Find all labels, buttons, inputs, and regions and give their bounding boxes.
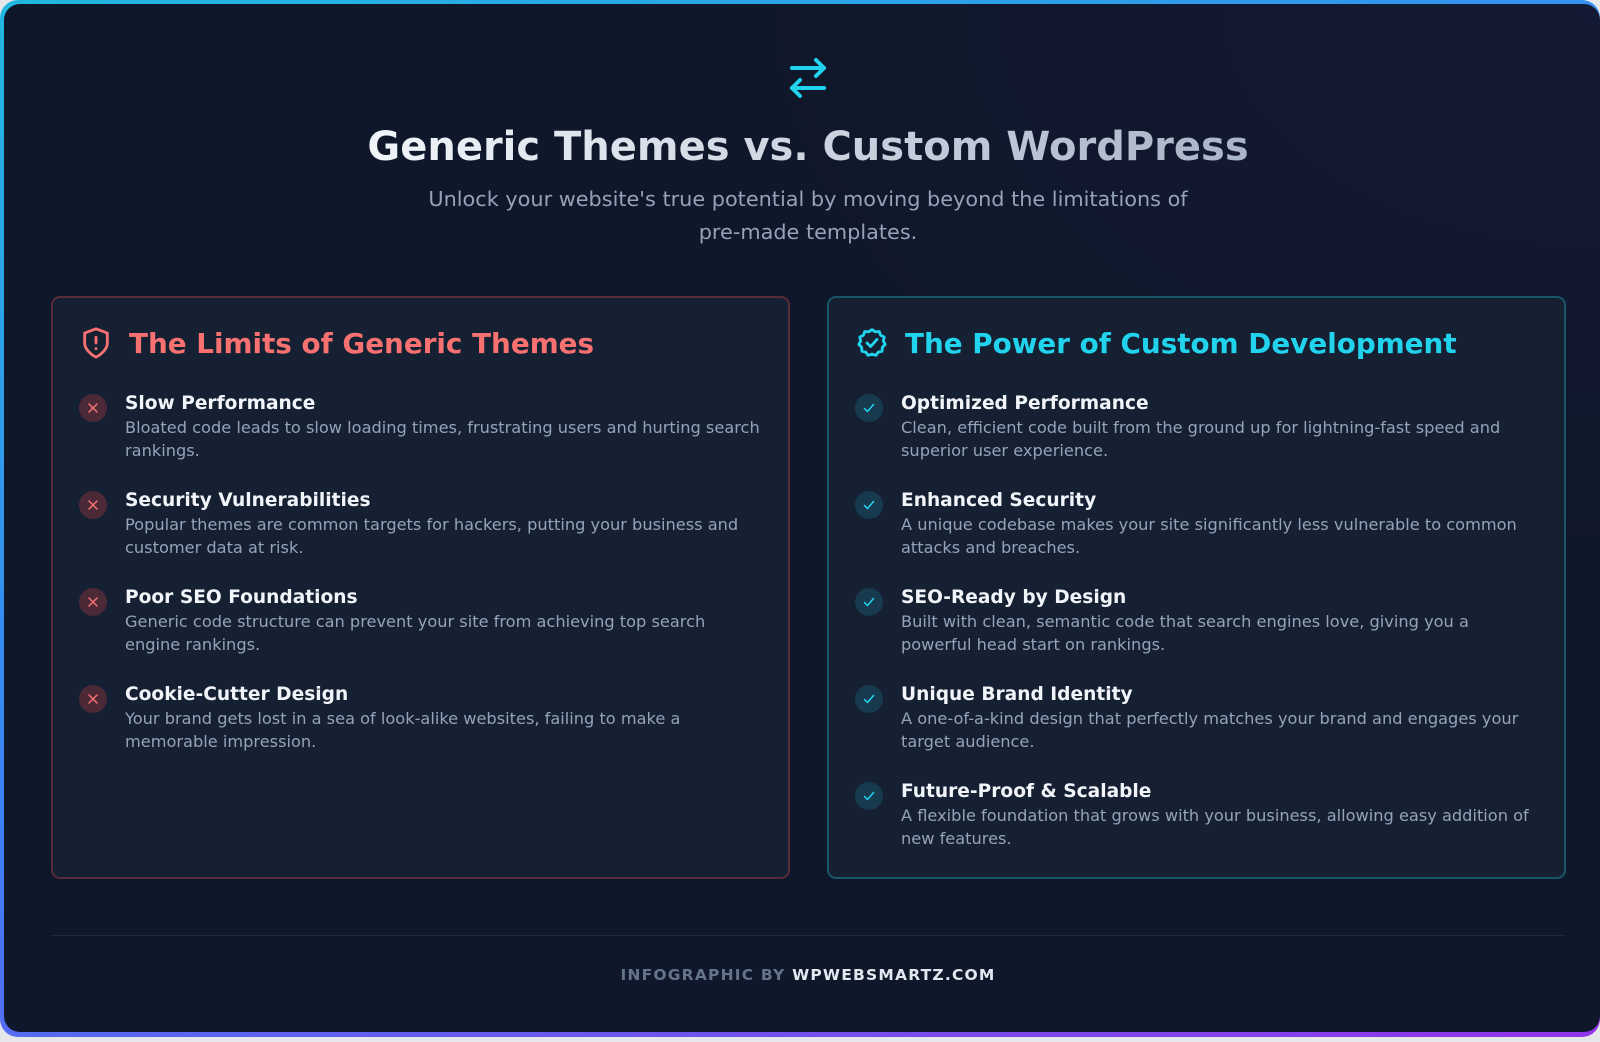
item: unique brand identity: [855, 684, 1518, 751]
item: seo-ready: Built with clean, semantic code that search engines love, giving you a powerful head start on rankings.: [901, 612, 1469, 654]
item: security vulnerabilities: [79, 490, 738, 557]
subtitle: pre-made templates.: [699, 220, 917, 244]
item: future-proof: Future-Proof & Scalable: [901, 781, 1151, 802]
item: optimized performance: Optimized Performance: [901, 393, 1149, 414]
item: cookie-cutter design: Cookie-Cutter Design: [125, 684, 348, 705]
item: enhanced security: A unique codebase makes your site significantly less vulnerable to common attacks and breaches.: [901, 515, 1517, 557]
panel: limits of generic themes: [51, 296, 790, 879]
item: poor seo: engine rankings.: [125, 635, 260, 654]
title: Generic Themes vs. Custom WordPress: [367, 124, 1249, 170]
item: poor seo: Generic code structure can prevent your site from achieving top search: [125, 612, 705, 631]
footer credit: INFOGRAPHIC BY WPWEBSMARTZ.COM: [620, 966, 996, 984]
item: poor seo: Poor SEO Foundations: [125, 587, 358, 608]
item: slow performance: Slow Performance: [125, 393, 315, 414]
panel heading: power: The Power of Custom Development: [905, 326, 1457, 360]
item: cookie-cutter design: Your brand gets lost in a sea of look-alike websites, failing to make a memorable impression.: [125, 709, 680, 751]
panel heading: limits: The Limits of Generic Themes: [129, 326, 594, 360]
item: slow performance: [79, 393, 760, 460]
item: unique brand identity: Unique Brand Identity: [901, 684, 1133, 705]
item: future-proof: [855, 781, 1529, 848]
item: enhanced security: Enhanced Security: [901, 490, 1096, 511]
item: security vulnerabilities: Security Vulnerabilities: [125, 490, 371, 511]
item: optimized performance: [855, 393, 1500, 460]
item: unique brand identity: A one-of-a-kind design that perfectly matches your brand and engages your target audience.: [901, 709, 1518, 751]
subtitle: Unlock your website's true potential by moving beyond the limitations of: [428, 187, 1188, 211]
item: seo-ready: SEO-Ready by Design: [901, 587, 1126, 608]
item: poor seo: [79, 587, 705, 654]
item: seo-ready: [855, 587, 1469, 654]
item: optimized performance: Clean, efficient code built from the ground up for lightning-fast speed and superior user experience.: [901, 418, 1500, 460]
panel: power of custom development: [827, 296, 1566, 879]
item: future-proof: A flexible foundation that grows with your business, allowing easy addition of new features.: [901, 806, 1529, 848]
item: enhanced security: [855, 490, 1517, 557]
item: cookie-cutter design: [79, 684, 680, 751]
icon: swap arrows: [790, 58, 826, 98]
subtitle: [428, 187, 1188, 244]
item: slow performance: Bloated code leads to slow loading times, frustrating users and hurting search rankings.: [125, 418, 760, 460]
item: security vulnerabilities: Popular themes are common targets for hackers, putting your business and customer data at risk.: [125, 515, 738, 557]
